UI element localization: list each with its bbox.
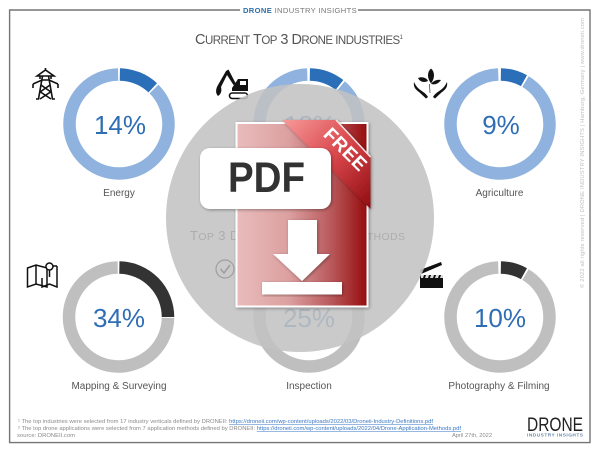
donut: Agriculture: 9% xyxy=(482,110,520,140)
donut: Energy: Energy xyxy=(103,188,135,199)
footnotes: April 27th, 2022 xyxy=(452,433,492,439)
donut: Inspection xyxy=(260,268,358,392)
donut: Energy: 14% xyxy=(94,110,146,140)
title: CURRENT TOP 3 DRONE INDUSTRIES xyxy=(195,32,400,48)
document page xyxy=(236,123,368,306)
FREE ribbon: FREE xyxy=(319,124,371,176)
donut: Inspection: Inspection xyxy=(286,381,332,392)
PDF label xyxy=(200,148,331,209)
vertical copyright note: © 2022 all rights reserved | DRONE INDUSTRY INSIGHTS | Hamburg, Germany | www.droneii.com xyxy=(579,18,586,288)
donut: Construction: 12% xyxy=(284,110,336,140)
donut: Inspection: 25% xyxy=(283,303,335,333)
hidden heading behind overlay: TOP 3 DRONE APPLICATION METHODS xyxy=(190,228,405,243)
title: 1 xyxy=(400,35,404,41)
donut: Photography and Filming: Photography & Filming xyxy=(448,381,550,392)
footnotes: ² The top drone applications were selected from 7 application methods defined by DRONEII: https://droneii.com/wp-content/uploads/2022/04/Drone-Application-Methods.pdf xyxy=(18,426,462,432)
donut: Agriculture xyxy=(432,56,568,199)
logo: INDUSTRY INSIGHTS xyxy=(527,432,584,438)
donut: Mapping and Surveying xyxy=(68,267,169,392)
PDF download badge xyxy=(200,120,371,306)
icon: map with pin xyxy=(28,263,57,287)
icon: plant in hands xyxy=(414,68,447,98)
donut: Mapping and Surveying: 34% xyxy=(93,303,145,333)
donut: Photography and Filming: 10% xyxy=(474,303,526,333)
FREE ribbon xyxy=(282,120,371,209)
overlay: grey circle xyxy=(166,84,434,352)
donut: Energy xyxy=(49,54,189,199)
footnotes: ¹ The top industries were selected from 17 industry verticals defined by DRONEII: https://droneii.com/wp-content/uploads/2022/03/Droneii-Industry-Definitions.pdf xyxy=(18,419,434,425)
donut: Agriculture: Agriculture xyxy=(476,188,524,199)
icon: clapperboard xyxy=(420,262,443,288)
donut: Photography and Filming xyxy=(432,249,568,392)
download arrow xyxy=(273,220,330,281)
icon: power pylon xyxy=(33,68,58,99)
footnotes xyxy=(17,419,492,439)
header brand: DRONE INDUSTRY INSIGHTS xyxy=(243,6,357,15)
PDF label: PDF xyxy=(228,154,305,202)
icon: excavator xyxy=(216,70,248,98)
logo: DRONE xyxy=(527,415,583,436)
footnotes: source: DRONEII.com xyxy=(17,433,76,439)
donut: Mapping and Surveying: Mapping & Surveying xyxy=(71,381,167,392)
download tray xyxy=(262,282,342,294)
donut: Construction xyxy=(239,54,379,194)
icon: check mark circle xyxy=(216,260,234,278)
